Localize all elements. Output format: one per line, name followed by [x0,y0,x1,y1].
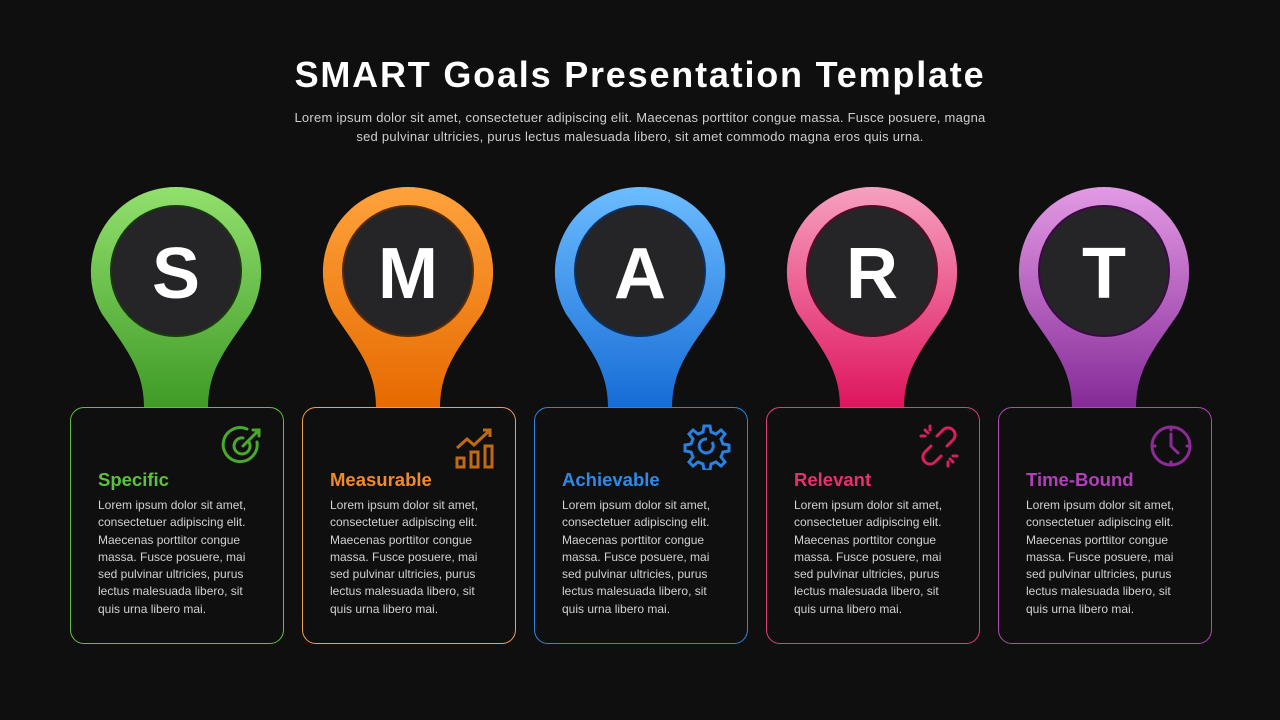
card: Relevant: Relevant [794,469,871,490]
card: Relevant: massa. Fusce posuere, mai [794,550,941,564]
card: Achievable: quis urna libero mai. [562,602,670,616]
pin M [323,187,493,408]
card: Measurable: lectus malesuada libero, sit [330,584,475,598]
subtitle [294,110,986,144]
card: Time-Bound: quis urna libero mai. [1026,602,1134,616]
pin M: M [378,234,438,314]
pin A: A [614,234,666,314]
card: Achievable: Maecenas porttitor congue [562,533,704,547]
pin R: R [846,234,898,314]
card: Time-Bound: sed pulvinar ultricies, purus [1026,567,1171,581]
pin R [787,187,957,408]
pin T: T [1082,234,1126,314]
pin S [91,187,261,408]
card: Achievable: Achievable [562,469,660,490]
icon: clock [1150,426,1192,466]
card: Time-Bound: consectetuer adipiscing elit. [1026,515,1173,529]
card: Time-Bound: Lorem ipsum dolor sit amet, [1026,498,1174,512]
card: Time-Bound: massa. Fusce posuere, mai [1026,550,1173,564]
title: SMART Goals Presentation Template [295,54,985,95]
card: Measurable: Lorem ipsum dolor sit amet, [330,498,478,512]
card: Measurable: consectetuer adipiscing elit. [330,515,477,529]
card: Specific: massa. Fusce posuere, mai [98,550,245,564]
card: Relevant: Lorem ipsum dolor sit amet, [794,498,942,512]
subtitle: sed pulvinar ultricies, purus lectus malesuada libero, sit amet commodo magna eros quis urna. [356,129,924,144]
pin S: S [152,234,200,314]
card: Achievable: consectetuer adipiscing elit. [562,515,709,529]
card: Measurable [302,407,516,644]
card: Measurable: Maecenas porttitor congue [330,533,472,547]
card: Achievable: Lorem ipsum dolor sit amet, [562,498,710,512]
card: Specific: lectus malesuada libero, sit [98,584,243,598]
icon: gear [684,424,730,470]
card: Time-Bound [998,407,1212,644]
card: Measurable: sed pulvinar ultricies, purus [330,567,475,581]
card: Specific: quis urna libero mai. [98,602,206,616]
card: Measurable: quis urna libero mai. [330,602,438,616]
icon: chart [456,428,494,468]
card: Specific: Specific [98,469,169,490]
card: Specific: consectetuer adipiscing elit. [98,515,245,529]
card: Measurable: Measurable [330,469,432,490]
card: Measurable: massa. Fusce posuere, mai [330,550,477,564]
card: Time-Bound: Time-Bound [1026,469,1134,490]
card: Specific [70,407,284,644]
pin T [1019,187,1189,408]
card: Relevant: quis urna libero mai. [794,602,902,616]
card: Achievable: massa. Fusce posuere, mai [562,550,709,564]
icon: broken link [920,424,958,468]
card: Achievable: lectus malesuada libero, sit [562,584,707,598]
card: Achievable: sed pulvinar ultricies, purus [562,567,707,581]
icon: target [222,426,260,464]
card: Time-Bound: Maecenas porttitor congue [1026,533,1168,547]
card: Relevant: sed pulvinar ultricies, purus [794,567,939,581]
card: Relevant: Maecenas porttitor congue [794,533,936,547]
pin A [555,187,725,408]
subtitle: Lorem ipsum dolor sit amet, consectetuer adipiscing elit. Maecenas porttitor congue massa. Fusce posuere, magna [294,110,986,125]
card: Time-Bound: lectus malesuada libero, sit [1026,584,1171,598]
card: Specific: Lorem ipsum dolor sit amet, [98,498,246,512]
card: Relevant [766,407,980,644]
card: Relevant: consectetuer adipiscing elit. [794,515,941,529]
card: Specific: sed pulvinar ultricies, purus [98,567,243,581]
card: Relevant: lectus malesuada libero, sit [794,584,939,598]
card: Specific: Maecenas porttitor congue [98,533,240,547]
card: Achievable [534,407,748,644]
